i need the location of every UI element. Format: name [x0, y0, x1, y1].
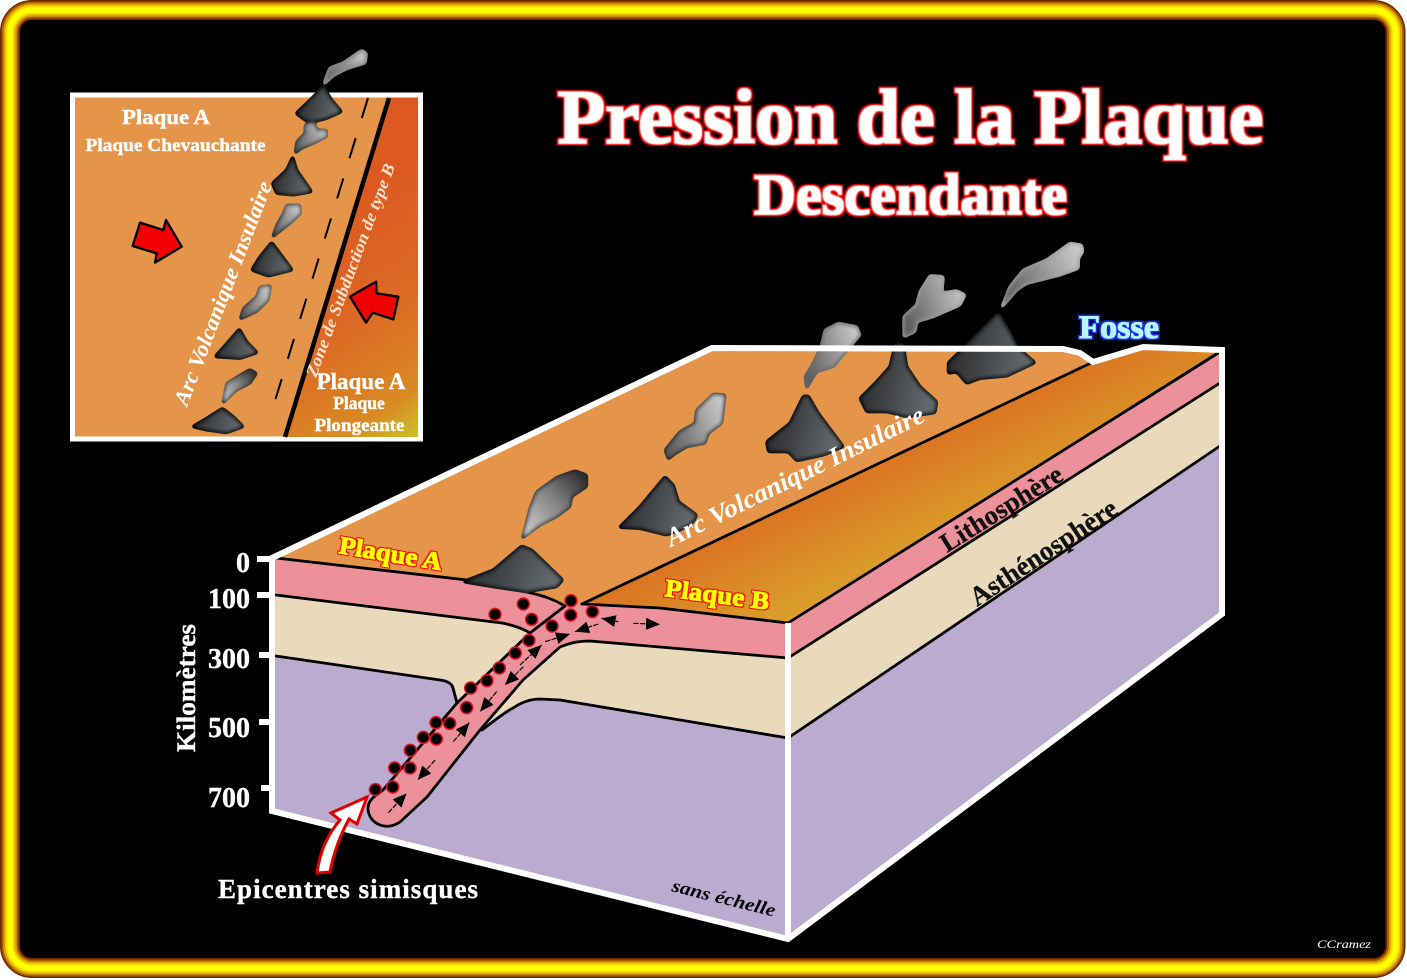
title line 1: Pression de la Plaque — [558, 74, 1264, 160]
front face: descending slab — [368, 604, 788, 826]
right side: asthenosphere — [788, 446, 1220, 938]
inset label: arc volcanique: Arc Volcanique Insulaire — [168, 177, 277, 411]
volcanoes, far row — [860, 313, 1035, 417]
white block outline — [272, 347, 1222, 939]
title — [558, 74, 1264, 227]
inset subduction zone line — [285, 98, 389, 437]
label: lithosphere: Lithosphère — [934, 459, 1068, 558]
top surface: plate B — [565, 347, 1220, 623]
label: arc volcanique insulaire: Arc Volcanique Insulaire — [659, 400, 929, 553]
volcanic plumes — [522, 394, 725, 538]
label: epicentres: Epicentres simisques — [218, 874, 478, 904]
label: plaque A: Plaque A — [337, 532, 444, 576]
title line 2: Descendante — [754, 162, 1067, 227]
depth scale labels: 100 — [208, 584, 250, 615]
inset dashed line — [270, 98, 368, 417]
inset volcanoes and plumes — [192, 51, 366, 433]
volcanoes — [463, 396, 843, 592]
front face: lithosphere A — [275, 558, 565, 633]
front face: asthenosphere — [275, 558, 788, 938]
inset label: plaque: Plaque — [333, 393, 385, 413]
depth scale labels: 300 — [208, 644, 250, 675]
layer boundary lines — [276, 352, 1220, 826]
depth ticks — [257, 559, 272, 788]
inset label: subduction zone: Zone de Subduction de type B — [302, 161, 399, 380]
axis label: kilometres: Kilomètres — [172, 624, 201, 752]
volcanic plumes, far row — [805, 243, 1083, 388]
inset red arrows — [133, 220, 398, 323]
depth scale labels: 500 — [208, 713, 250, 744]
stress arrows in slab — [388, 618, 660, 813]
seismic epicentres — [369, 595, 598, 796]
inset label: plaque A: Plaque A — [122, 105, 210, 129]
depth scale labels: 700 — [208, 783, 250, 814]
inset plate A surface — [72, 95, 420, 439]
panel: map inset — [72, 51, 420, 439]
front face: tan layer A — [275, 595, 530, 703]
right side: tan layer — [788, 383, 1220, 738]
inset label: plongeante: Plongeante — [314, 415, 405, 435]
top surface: plate A — [275, 348, 1093, 606]
label: asthenosphere: Asthénosphère — [964, 493, 1123, 612]
depth scale labels — [208, 548, 250, 814]
block diagram — [257, 243, 1222, 939]
epicentre pointer arrow — [317, 797, 367, 873]
inset label: plaque A lower: Plaque A — [317, 369, 406, 394]
label: plaque B: Plaque B — [663, 575, 771, 616]
credit: CCramez — [1317, 937, 1371, 951]
inset label: plaque chevauchante: Plaque Chevauchante — [86, 135, 266, 155]
right side: lithosphere — [788, 352, 1220, 658]
label: fosse: Fosse — [1079, 310, 1159, 346]
label: sans echelle: sans échelle — [669, 876, 777, 921]
depth scale labels: 0 — [236, 548, 250, 579]
inset plate B surface — [285, 98, 418, 437]
front face: tan layer B — [482, 641, 788, 738]
